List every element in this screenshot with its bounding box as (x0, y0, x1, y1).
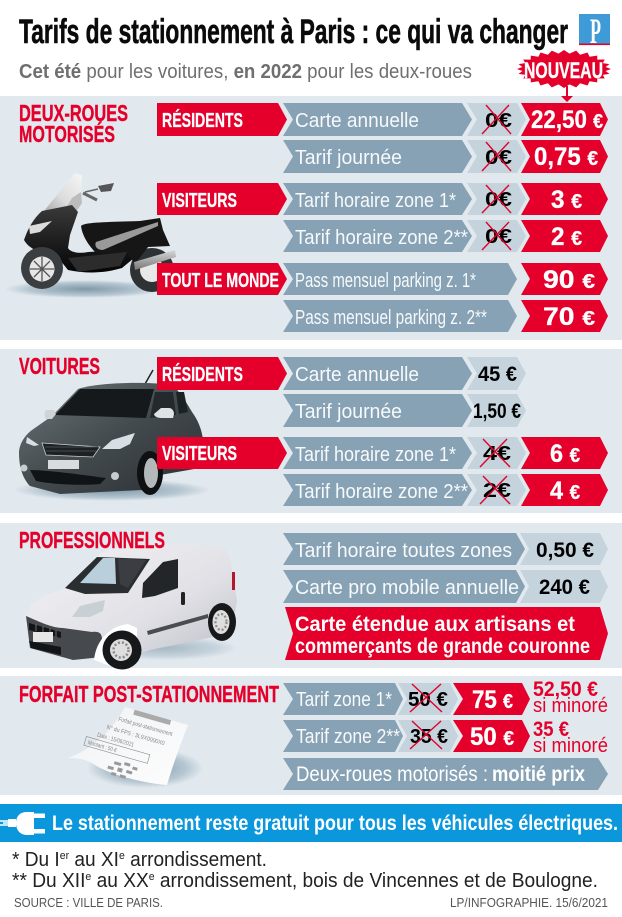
row: visiteurs voitures (157, 437, 287, 469)
illustration: ticket: Montant : 50 € (87, 740, 118, 754)
footnote 2: e (149, 871, 155, 883)
panel: deux-roues motorisés (0, 96, 622, 340)
icon: electric plug (0, 812, 45, 835)
row: deux-roues moitié prix (283, 758, 608, 790)
banner: véhicules électriques (0, 804, 622, 842)
heading: forfait post-stationnement: FORFAIT POST-STATIONNEMENT (19, 681, 279, 707)
row: tarif horaire zone 2 deux-roues: 0€ (485, 226, 512, 248)
heading: deux-roues motorisés: MOTORISÉS (19, 120, 115, 147)
callout: carte étendue (285, 607, 608, 660)
heading: deux-roues motorisés (19, 100, 128, 147)
row: résidents deux-roues (157, 103, 287, 136)
row: tarif horaire zone 2 voitures: 4 € (550, 477, 580, 505)
credit: LP/INFOGRAPHIE. 15/6/2021 (450, 895, 608, 910)
row: tarif zone 2: si minoré (533, 735, 608, 757)
row: carte annuelle: 0€ (485, 110, 512, 132)
row: tarif journée: 0€ (485, 147, 512, 169)
row: carte annuelle (283, 103, 608, 136)
illustration: ticket: N° du FPS : 3L9X0000X0 (106, 725, 166, 747)
row: tarif horaire toutes zones: 0,50 € (536, 539, 594, 562)
row: tarif horaire zone 1 voitures: Tarif horaire zone 1* (295, 443, 456, 466)
row: tarif journée: Tarif journée (295, 146, 402, 169)
row: résidents deux-roues: RÉSIDENTS (162, 109, 243, 132)
row: pass mensuel zone 1: Pass mensuel parking z. 1* (295, 269, 476, 292)
row: tarif horaire zone 1 voitures: 4€ (483, 443, 511, 465)
row: visiteurs deux-roues (157, 183, 287, 215)
row: carte pro mobile annuelle: 240 € (539, 576, 590, 599)
row: tarif zone 1: 50 € (408, 689, 448, 711)
row: visiteurs deux-roues: VISITEURS (162, 190, 237, 212)
heading: professionnels: PROFESSIONNELS (19, 527, 165, 553)
footnote 2: e (85, 871, 91, 883)
row: tarif horaire zone 2 deux-roues (283, 220, 608, 252)
panel: voitures (0, 349, 622, 513)
row: pass mensuel zone 2: Pass mensuel parking z. 2** (295, 306, 487, 329)
row: carte pro mobile annuelle (283, 570, 608, 603)
row: pass mensuel zone 2: 70 € (543, 303, 595, 331)
row: tarif zone 2 (283, 718, 608, 757)
row: tarif horaire zone 2 deux-roues: Tarif horaire zone 2** (295, 226, 468, 249)
illustration: ticket: Forfait post-stationnement (117, 717, 173, 738)
row: tarif horaire zone 1 voitures: 6 € (550, 440, 580, 468)
illustration: scooter (5, 173, 176, 298)
row: tarif horaire zone 2 deux-roues: 2 € (551, 223, 582, 251)
row: tarif zone 1: 52,50 € (533, 678, 598, 701)
row: carte annuelle voitures: 45 € (478, 363, 517, 386)
illustration: van (25, 544, 237, 670)
row: tarif zone 1: 75 € (472, 686, 513, 714)
row: tout le monde (157, 263, 287, 295)
row: tarif zone 2: 35 € (533, 718, 569, 741)
illustration: car (14, 370, 210, 501)
row: tarif journée (283, 140, 608, 173)
subtitle: Cet été pour les voitures, en 2022 pour les deux-roues (19, 61, 472, 83)
row: tarif horaire zone 1 deux-roues (283, 183, 608, 215)
row: tarif horaire zone 1 deux-roues: 0€ (485, 189, 512, 211)
row: carte annuelle voitures: Carte annuelle (295, 363, 419, 386)
row: tout le monde: TOUT LE MONDE (162, 270, 279, 292)
footnote 2: au XX (91, 870, 149, 892)
row: tarif horaire toutes zones: Tarif horaire toutes zones (295, 539, 512, 562)
row: tarif zone 2: Tarif zone 2** (296, 725, 400, 748)
row: tarif horaire zone 2 voitures: 2€ (483, 480, 511, 502)
heading: voitures: VOITURES (19, 353, 100, 379)
row: tarif journée voitures (283, 394, 526, 427)
footnote 1: e (119, 850, 125, 862)
panel: professionnels (0, 523, 622, 668)
row: carte annuelle: Carte annuelle (295, 109, 419, 132)
row: résidents voitures: RÉSIDENTS (162, 363, 243, 386)
row: tarif zone 1: si minoré (533, 695, 608, 717)
row: tarif zone 1: Tarif zone 1* (296, 688, 392, 711)
icon: Le Parisien logo: P (590, 11, 601, 51)
footnote 2: ** Du XII (12, 870, 89, 892)
callout: carte étendue: Carte étendue aux artisans et (295, 613, 575, 636)
illustration: ticket: Date : 15/06/2021 (96, 733, 135, 749)
illustration: ticket (68, 699, 203, 788)
row: visiteurs voitures: VISITEURS (162, 443, 237, 465)
row: tarif zone 2: 35 € (410, 726, 448, 748)
row: tarif horaire zone 1 deux-roues: 3 € (551, 186, 582, 214)
row: tarif zone 2: 50 € (470, 723, 514, 751)
footnote 1: arrondissement. (125, 849, 267, 871)
icon: Le Parisien logo (579, 11, 610, 51)
footnote 2: arrondissement, bois de Vincennes et de Boulogne. (155, 870, 598, 892)
row: tarif journée voitures: 1,50 € (473, 400, 521, 423)
row: tarif horaire zone 2 voitures: Tarif horaire zone 2** (295, 480, 468, 503)
row: tarif horaire zone 1 voitures (283, 437, 608, 469)
row: tarif horaire zone 2 voitures (283, 474, 608, 506)
footnote 1: er (60, 850, 69, 862)
row: carte pro mobile annuelle: Carte pro mobile annuelle (295, 576, 519, 599)
row: deux-roues moitié prix: Deux-roues motorisés : (296, 763, 488, 786)
badge: nouveau (517, 50, 611, 102)
row: pass mensuel zone 1 (283, 263, 608, 295)
row: pass mensuel zone 2 (283, 300, 608, 332)
row: tarif horaire toutes zones (283, 533, 608, 565)
footnote 1: au XI (69, 849, 119, 871)
row: deux-roues moitié prix: moitié prix (492, 763, 585, 786)
heading: deux-roues motorisés: DEUX-ROUES (19, 100, 128, 126)
footnote 1: * Du I (12, 849, 62, 871)
row: résidents voitures (157, 357, 287, 390)
row: tarif zone 1 (283, 678, 608, 717)
row: tarif journée: 0,75 € (534, 143, 598, 171)
source: SOURCE : VILLE DE PARIS. (14, 895, 163, 910)
row: tarif journée voitures: Tarif journée (295, 400, 402, 423)
row: pass mensuel zone 1: 90 € (543, 266, 595, 294)
row: carte annuelle voitures (283, 357, 526, 390)
panel: forfait post-stationnement (0, 676, 622, 795)
row: tarif horaire zone 1 deux-roues: Tarif horaire zone 1* (295, 189, 456, 212)
row: carte annuelle: 22,50 € (531, 106, 603, 134)
